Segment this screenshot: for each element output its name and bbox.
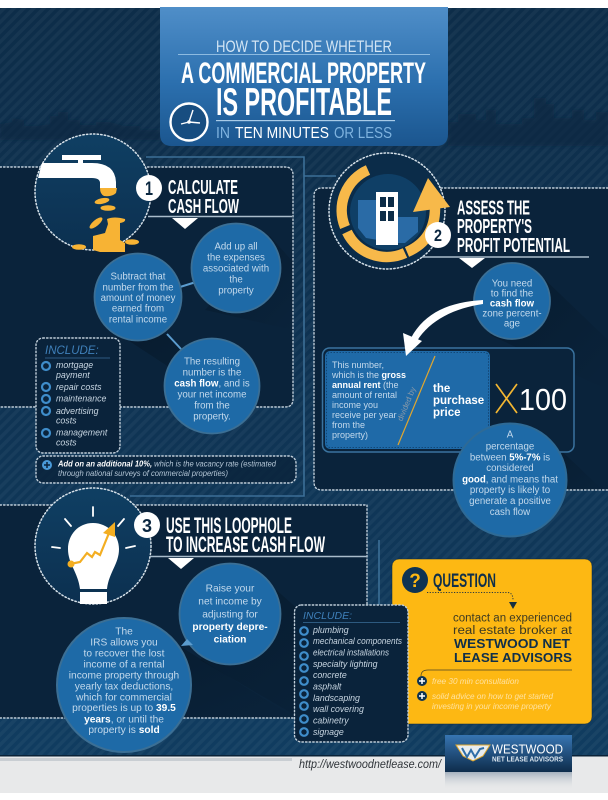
footer band xyxy=(0,755,608,793)
text: the purchase price: price xyxy=(433,407,460,419)
heading: assess the property's profit potential xyxy=(422,198,589,268)
text: contact a broker: real estate broker at xyxy=(453,625,573,637)
bubble: you need to find the cash flow: You need xyxy=(492,278,532,290)
heading: use this loophole xyxy=(150,513,367,569)
heading: assess the property's profit potential: PROPERTY'S xyxy=(457,216,532,238)
bubble: add up all the expenses: property xyxy=(218,286,254,296)
bubble: you need to find the cash flow: cash flow xyxy=(490,298,535,310)
text: gross annual rent: receive per year xyxy=(332,410,397,420)
bubble: percentage between 5%-7%: property is likely to xyxy=(470,485,550,496)
text: gross annual rent: property) xyxy=(332,430,368,440)
text: gross annual rent: income you xyxy=(332,400,378,410)
bullets: consultation benefits: investing in your income property xyxy=(432,702,552,711)
bubble: add up all the expenses: Add up all xyxy=(214,242,258,252)
panel: include list step 3: asphalt xyxy=(313,682,342,692)
bubble: the resulting number: cash flow, and is xyxy=(174,378,250,390)
callout: add on an additional 10%: through national surveys of commercial properties) xyxy=(58,469,228,478)
heading: how to decide: HOW TO DECIDE WHETHER xyxy=(216,38,392,56)
panel: include list step 3: specialty lighting xyxy=(313,659,378,669)
panel: step 3 background xyxy=(0,505,367,718)
panel: include list step 3: wall covering xyxy=(313,704,364,714)
text: gross annual rent: from the xyxy=(332,420,365,430)
step 1 number: 1 xyxy=(145,179,153,200)
text: contact a broker xyxy=(453,612,573,665)
panel: include list step 3: landscaping xyxy=(313,693,360,703)
callout: add on an additional 10%: Add on an additional 10%, which is the vacancy rate (estimated xyxy=(57,460,276,468)
bubble: add up all the expenses: the expenses xyxy=(207,252,265,264)
bubble: subtract that number xyxy=(94,254,182,340)
text: contact a broker: contact an experienced xyxy=(453,612,572,624)
panel: formula xyxy=(322,348,574,452)
bubble: the IRS allows you: years, or until the xyxy=(84,714,164,726)
bubble: you need to find the cash flow xyxy=(474,263,550,339)
step 2 number xyxy=(425,222,451,248)
heading: use this loophole: USE THIS LOOPHOLE xyxy=(166,513,292,538)
heading: calculate cash flow xyxy=(148,177,292,229)
connectors between step 1 bubbles xyxy=(167,282,196,349)
bubble: percentage between 5%-7%: generate a positive xyxy=(469,496,551,507)
panel: include list step 1: advertising xyxy=(56,406,99,416)
text: gross annual rent xyxy=(331,360,406,440)
panel: include list step 1 xyxy=(36,338,120,453)
step 1 number xyxy=(136,175,162,201)
heading: in ten minutes or less xyxy=(216,125,392,142)
bubble: the IRS allows you: to recover the lost xyxy=(84,648,165,660)
bubble: raise your net income: Raise your xyxy=(206,584,255,594)
panel: include list step 1: payment xyxy=(55,370,90,380)
bubble: the IRS allows you: IRS allows you xyxy=(90,638,158,648)
bubble: the resulting number: from the xyxy=(194,400,230,412)
bubble: the IRS allows you: property is sold xyxy=(88,725,160,736)
text: 100: 100 xyxy=(519,383,567,417)
step 2 number: 2 xyxy=(434,226,442,245)
city skyline silhouette xyxy=(0,98,608,146)
panel: include list step 3 xyxy=(294,605,408,742)
bubble: raise your net income: net income by xyxy=(198,596,263,608)
bubble: add up all the expenses: associated with xyxy=(203,264,269,274)
heading: is profitable: IS PROFITABLE xyxy=(216,81,392,124)
bullets: consultation benefits: free 30 min consultation xyxy=(432,677,519,686)
bubble: percentage between 5%-7%: A xyxy=(507,430,514,440)
bubble: the resulting number: The resulting xyxy=(184,356,240,368)
heading: calculate cash flow: CALCULATE xyxy=(168,177,238,199)
logo: westwood net lease advisors xyxy=(445,735,572,790)
bubble: the IRS allows you xyxy=(57,618,191,752)
bubble: percentage between 5%-7%: percentage xyxy=(486,442,534,452)
text: the purchase price xyxy=(433,383,484,419)
bubble: percentage between 5%-7%: cash flow xyxy=(490,507,531,518)
heading: a commercial property: A COMMERCIAL PROPERTY xyxy=(181,57,426,90)
bullets: consultation benefits: solid advice on how to get started xyxy=(432,692,553,701)
text: gross annual rent: annual rent (the xyxy=(332,380,399,390)
step 3 number: 3 xyxy=(142,516,152,536)
bubble: the resulting number: number is the xyxy=(183,368,241,378)
panel: include list step 3: mechanical components xyxy=(313,636,403,646)
text: gross annual rent: amount of rental xyxy=(332,390,397,400)
bubble: percentage between 5%-7% xyxy=(454,424,566,536)
bubble: raise your net income: ciation xyxy=(214,634,246,646)
text: the purchase price: the xyxy=(433,383,450,395)
bubble: subtract that number: rental income xyxy=(109,314,167,326)
icon: building with circular arrow xyxy=(329,153,450,269)
long circle shadows xyxy=(120,236,608,718)
panel: include list step 3: electrical installations xyxy=(313,648,390,658)
bubble: you need to find the cash flow: zone percent- xyxy=(482,308,542,320)
logo: westwood net lease advisors: NET LEASE ADVISORS xyxy=(492,756,563,764)
bubble: add up all the expenses xyxy=(192,224,280,312)
logo: westwood net lease advisors: WESTWOOD xyxy=(492,742,563,756)
heading: assess the property's profit potential: ASSESS THE xyxy=(457,198,530,220)
panel: include list step 3: plumbing xyxy=(312,625,349,635)
panel: include list step 1: costs xyxy=(56,416,77,426)
panel outlines xyxy=(0,167,608,718)
text: contact a broker: WESTWOOD NET xyxy=(454,636,570,651)
header banner xyxy=(160,7,448,146)
bubble: raise your net income: property depre- xyxy=(192,622,268,633)
bullets: consultation benefits xyxy=(417,676,553,711)
panel: include list step 3: INCLUDE: xyxy=(303,610,352,622)
bubble: the IRS allows you: which for commercial xyxy=(75,692,172,704)
heading: in ten minutes or less: OR LESS xyxy=(334,125,392,142)
panel: include list step 1: costs xyxy=(56,438,77,448)
text: contact a broker: LEASE ADVISORS xyxy=(454,650,572,665)
bubble: raise your net income xyxy=(180,564,280,664)
connector between step 3 bubbles xyxy=(181,639,193,646)
panel: include list step 1: mortgage xyxy=(56,360,93,370)
panel: include list step 1: management xyxy=(56,428,108,438)
icon: question mark: ? xyxy=(409,571,421,592)
bubble: percentage between 5%-7%: between 5%-7% is xyxy=(470,452,550,464)
bubble: the IRS allows you: income property through xyxy=(69,670,179,682)
heading: in ten minutes or less: IN xyxy=(216,125,230,142)
bubble: percentage between 5%-7%: good, and means that xyxy=(462,474,558,486)
bubble: subtract that number: number from the xyxy=(102,282,174,294)
text: gross annual rent: which is the gross xyxy=(331,370,406,380)
heading: calculate cash flow: CASH FLOW xyxy=(168,196,239,218)
heading: question: QUESTION xyxy=(433,570,496,592)
multiply sign xyxy=(496,384,517,413)
bubble: the IRS allows you: properties is up to 39.5 xyxy=(72,703,176,714)
icon: light bulb with rising chart xyxy=(35,488,151,604)
bubble: subtract that number: earned from xyxy=(112,304,164,314)
heading: in ten minutes or less: TEN MINUTES xyxy=(235,125,329,142)
heading: use this loophole: TO INCREASE CASH FLOW xyxy=(166,532,325,557)
bubble: the resulting number: your net income xyxy=(178,390,246,400)
bubble: subtract that number: Subtract that xyxy=(111,272,166,282)
bubble: the IRS allows you: income of a rental xyxy=(84,660,164,670)
icon: faucet and coins xyxy=(35,134,151,252)
bubble: percentage between 5%-7%: considered xyxy=(486,463,534,474)
bubble: the resulting number: property. xyxy=(193,412,231,422)
step 3 number xyxy=(134,512,160,538)
icon: question mark xyxy=(402,567,428,593)
panel: include list step 3: signage xyxy=(313,727,344,737)
bubble: the IRS allows you: The xyxy=(115,626,133,638)
panel: step 1 background xyxy=(0,167,293,407)
panel: include list step 3: cabinetry xyxy=(313,716,349,726)
bubble: the IRS allows you: yearly tax deductions, xyxy=(75,682,173,692)
arrow: cash flow to formula xyxy=(403,300,483,356)
divider: divided by xyxy=(396,356,435,445)
bubble: raise your net income: adjusting for xyxy=(202,610,258,620)
bubble: you need to find the cash flow: age xyxy=(504,318,520,330)
url: http://westwoodnetlease.com/ xyxy=(299,757,442,771)
connector lines between sections xyxy=(130,157,379,605)
bubble: add up all the expenses: the xyxy=(229,274,243,286)
bubble: the resulting number xyxy=(164,338,260,434)
bubble: you need to find the cash flow: to find the xyxy=(491,288,533,300)
dotted arrow xyxy=(427,592,517,609)
text: the purchase price: purchase xyxy=(433,395,484,407)
panel: include list step 1: maintenance xyxy=(56,394,106,404)
panel: step 2 background xyxy=(314,188,608,490)
text: gross annual rent: This number, xyxy=(332,360,384,370)
callout: add on an additional 10% xyxy=(36,456,296,483)
panel: include list step 1: INCLUDE: xyxy=(45,345,99,357)
panel: include list step 1: repair costs xyxy=(56,382,102,392)
panel: include list step 3: concrete xyxy=(313,670,347,680)
divider: divided by: divided by xyxy=(396,386,418,422)
panel: question callout xyxy=(392,559,592,724)
bubble: subtract that number: amount of money xyxy=(101,293,176,304)
icon: clock xyxy=(170,104,208,140)
